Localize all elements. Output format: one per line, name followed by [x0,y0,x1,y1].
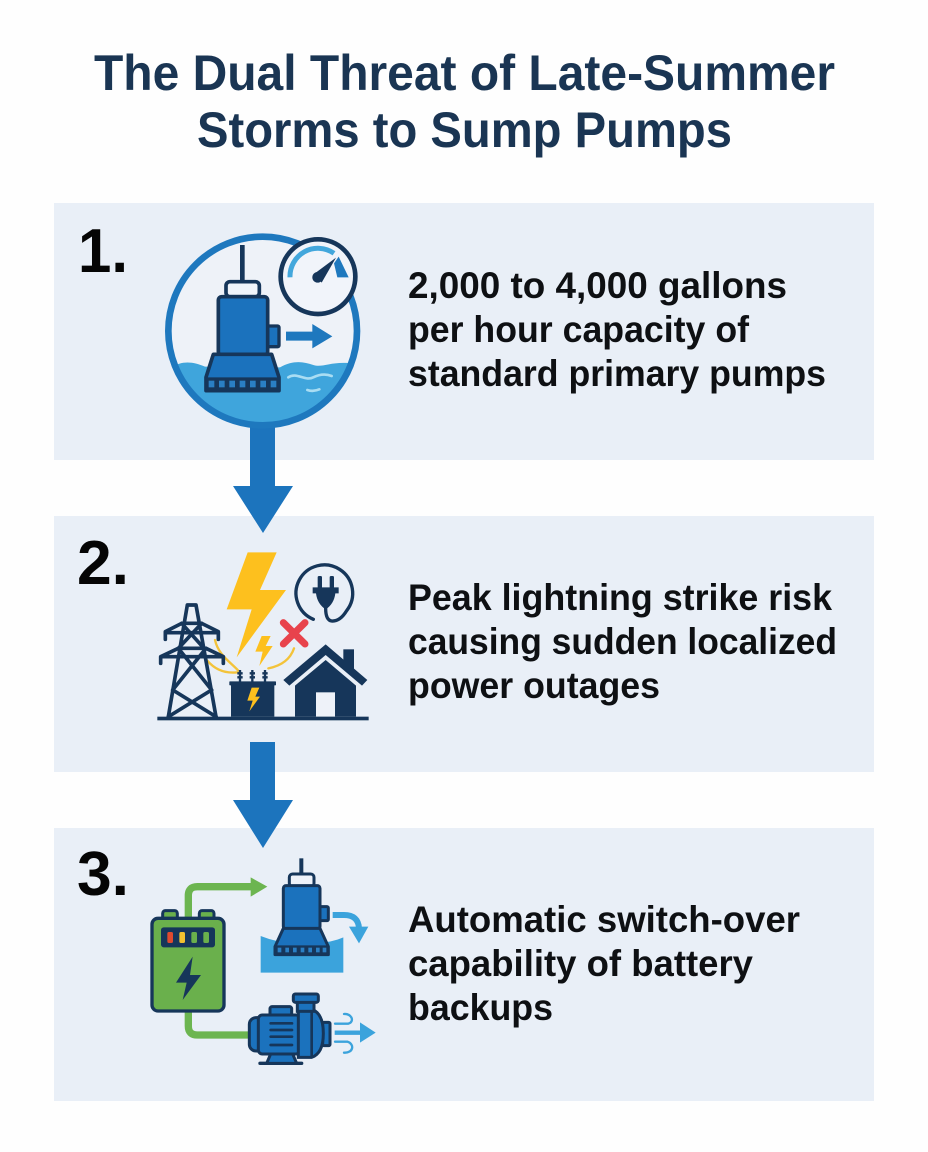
title [94,45,835,158]
text block: pump capacity [408,264,826,394]
arrow: step 1 to step 2 [233,420,293,533]
title: The Dual Threat of Late-Summer [94,45,835,101]
text block: pump capacity: 2,000 to 4,000 gallons [408,264,787,306]
panel: step 2 lightning risk [54,516,874,772]
gauge [281,239,355,314]
text block: pump capacity: standard primary pumps [408,352,826,394]
text block: battery backups [408,898,800,1028]
text block: lightning risk: causing sudden localized [408,620,837,662]
green power lines [188,877,267,1035]
text block: lightning risk [408,576,837,706]
text block: battery backups: capability of battery [408,942,753,984]
title: Storms to Sump Pumps [197,102,732,158]
panel: step 1 primary pump capacity [54,203,874,460]
centrifugal pump [249,994,376,1063]
yellow wires [207,640,294,673]
battery [152,911,224,1011]
icon: submersible pump in water with gauge [168,237,357,427]
power plug [296,565,353,621]
text block: lightning risk: Peak lightning strike risk [408,576,832,618]
text block: pump capacity: per hour capacity of [408,308,749,350]
house [283,644,367,717]
step number 2: 2. [77,529,129,598]
lightning bolts [227,552,286,666]
step number 1: 1. [78,217,128,286]
arrow: step 2 to step 3 [233,742,293,848]
icon: battery backup powering pumps [152,858,376,1063]
transmission tower [161,605,223,717]
panel: step 3 battery backup [54,828,874,1101]
submersible pump in basin [261,858,368,973]
transformer [229,670,276,717]
step number 3: 3. [77,840,129,909]
text block: battery backups: Automatic switch-over [408,898,800,940]
ground line [157,717,369,720]
icon: lightning strike, transformer and house outage [157,552,369,720]
red X [283,623,305,644]
text block: lightning risk: power outages [408,664,660,706]
text block: battery backups: backups [408,986,553,1028]
